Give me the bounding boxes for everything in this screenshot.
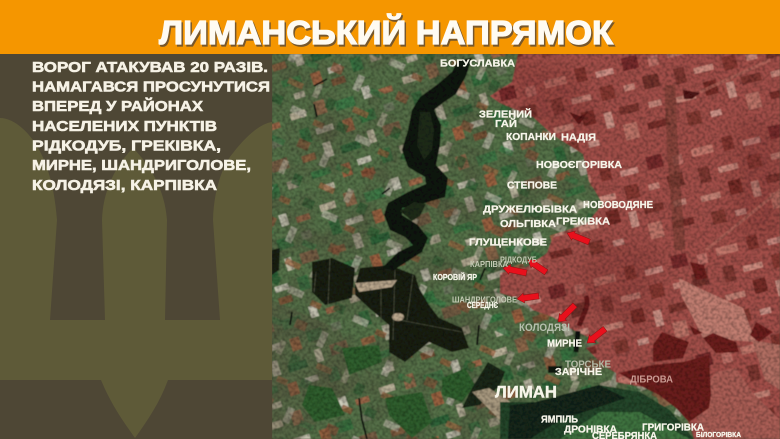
label: Рідкодуб: РІДКОДУБ — [500, 254, 537, 264]
label: Зелений Гай — [479, 108, 532, 130]
panel: left background with trident — [0, 54, 272, 439]
label: Григорівка: ГРИГОРІВКА — [642, 422, 704, 434]
text block: enemy attacks summary: НАМАГАВСЯ ПРОСУНУТИСЯ — [32, 78, 270, 96]
label: Білогорівка: БІЛОГОРІВКА — [696, 432, 741, 439]
label: Надія: НАДІЯ — [561, 132, 596, 144]
arrow 2 — [502, 263, 528, 278]
label: Лиман: ЛИМАН — [495, 384, 557, 402]
text block: enemy attacks summary: ВОРОГ АТАКУВАВ 20 РАЗІВ. — [32, 59, 268, 76]
label: Ольгівка: ОЛЬГІВКА — [500, 218, 556, 230]
arrow 3 — [525, 256, 549, 276]
label: Зелений Гай: ЗЕЛЕНИЙ — [479, 108, 532, 120]
label: Глущенкове: ГЛУЩЕНКОВЕ — [469, 236, 547, 248]
river — [382, 58, 472, 270]
text block: enemy attacks summary: КОЛОДЯЗІ, КАРПІВКА — [32, 177, 217, 194]
label: Середнє: СЕРЕДНЄ — [467, 301, 498, 310]
text block: enemy attacks summary: РІДКОДУБ, ГРЕКІВКА, — [32, 138, 221, 154]
text block: enemy attacks summary: НАСЕЛЕНИХ ПУНКТІВ — [32, 118, 217, 135]
forest: south of Dibrova — [500, 385, 694, 439]
forest: dark north-west block — [272, 248, 469, 362]
label: Греківка: ГРЕКІВКА — [556, 216, 610, 228]
sand zone — [679, 278, 756, 342]
text block: enemy attacks summary: МИРНЕ, ШАНДРИГОЛОВЕ, — [32, 157, 251, 174]
arrow 4 — [516, 291, 539, 304]
label: Копанки: КОПАНКИ — [506, 131, 556, 143]
grain overlay — [272, 54, 780, 439]
text block: enemy attacks summary — [32, 59, 270, 194]
dark red forest — [619, 262, 773, 422]
road band — [670, 85, 680, 250]
river island — [417, 112, 434, 160]
Zarichne dark spot — [548, 366, 562, 373]
arrows: enemy attack directions — [502, 228, 608, 347]
label: Дронівка: ДРОНІВКА — [564, 424, 617, 436]
label: Новоєгорівка: НОВОЄГОРІВКА — [536, 159, 622, 171]
map: satellite view — [272, 54, 780, 439]
arrow 1 — [565, 228, 591, 247]
label: Коровій Яр: КОРОВІЙ ЯР — [433, 271, 477, 282]
label: Зелений Гай: ГАЙ — [495, 117, 517, 130]
sand patch — [355, 280, 397, 292]
forest: near Lyman — [462, 362, 505, 408]
forest: green blocks — [302, 345, 475, 438]
tonal patches over farmland — [272, 54, 780, 439]
arrow 5 — [554, 301, 579, 326]
label: Колодязі: КОЛОДЯЗІ — [519, 322, 570, 334]
forest clearing lines — [314, 258, 462, 340]
label: Богуславка: БОГУСЛАВКА — [440, 58, 515, 70]
map labels: settlements — [433, 58, 741, 439]
header bar — [0, 0, 780, 54]
dark blobs — [683, 90, 700, 99]
stream in red zone — [579, 296, 587, 326]
label: Діброва: ДІБРОВА — [630, 374, 673, 386]
black stream — [576, 331, 578, 352]
label: Торське: ТОРСЬКЕ — [565, 358, 611, 370]
title: ЛИМАНСЬКИЙ НАПРЯМОК — [159, 13, 614, 52]
label: Нововодяне: НОВОВОДЯНЕ — [583, 199, 653, 211]
title: ЛИМАНСЬКИЙ НАПРЯМОК — [160, 15, 615, 54]
occupied territory: red zone — [470, 54, 780, 439]
label: Степове: СТЕПОВЕ — [507, 180, 557, 192]
label: Мирне: МИРНЕ — [547, 338, 582, 350]
label: Дружелюбівка: ДРУЖЕЛЮБІВКА — [483, 204, 577, 216]
arrow 6 — [584, 325, 608, 347]
label: Карпівка: КАРПІВКА — [470, 259, 508, 269]
label: Зарічне: ЗАРІЧНЕ — [555, 366, 602, 378]
label: Шандриголове: ШАНДРИГОЛОВЕ — [452, 294, 517, 304]
streams — [290, 79, 485, 439]
trident emblem — [0, 118, 272, 438]
text block: enemy attacks summary: ВПЕРЕД У РАЙОНАХ — [32, 97, 203, 115]
label: Ямпіль: ЯМПІЛЬ — [541, 414, 578, 426]
